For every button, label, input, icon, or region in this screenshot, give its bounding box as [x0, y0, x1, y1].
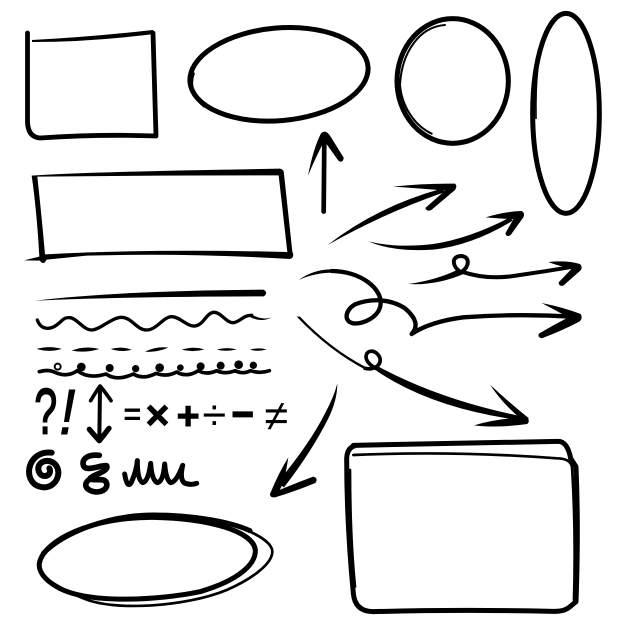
question and exclamation marks: ? [34, 376, 57, 448]
wavy line [37, 312, 272, 330]
arrow: down-left [270, 383, 337, 497]
bottom oval frame [39, 515, 272, 606]
large rectangle frame [347, 441, 577, 612]
math symbols: ≠ [264, 393, 288, 441]
arrow: long down-right with loop [297, 317, 529, 427]
top oval frame [186, 20, 372, 128]
looped scallop line [39, 360, 269, 378]
arrow: sweeping right [368, 211, 524, 250]
math symbols [123, 392, 288, 441]
arrow: small loop right [408, 256, 582, 286]
math symbols: + [177, 394, 200, 438]
zigzag loops doodle [125, 461, 197, 485]
math symbols: − [232, 394, 253, 435]
small rectangle frame [28, 30, 156, 138]
double-headed vertical arrow [89, 386, 111, 441]
tall oval frame [533, 13, 599, 213]
question and exclamation marks: ! [59, 376, 75, 448]
coil doodle [83, 455, 107, 492]
math symbols: × [146, 392, 169, 438]
up arrow [308, 132, 344, 214]
arrow: curved up-right [328, 184, 456, 245]
dashed line [37, 347, 267, 352]
circle frame [397, 19, 508, 143]
math symbols: = [123, 398, 141, 432]
long tapered line [35, 290, 266, 301]
math symbols: ÷ [202, 392, 226, 440]
wide rectangle frame [24, 169, 293, 263]
arrow: swirl right [299, 269, 582, 338]
question and exclamation marks [34, 376, 75, 448]
spiral doodle [29, 452, 58, 487]
